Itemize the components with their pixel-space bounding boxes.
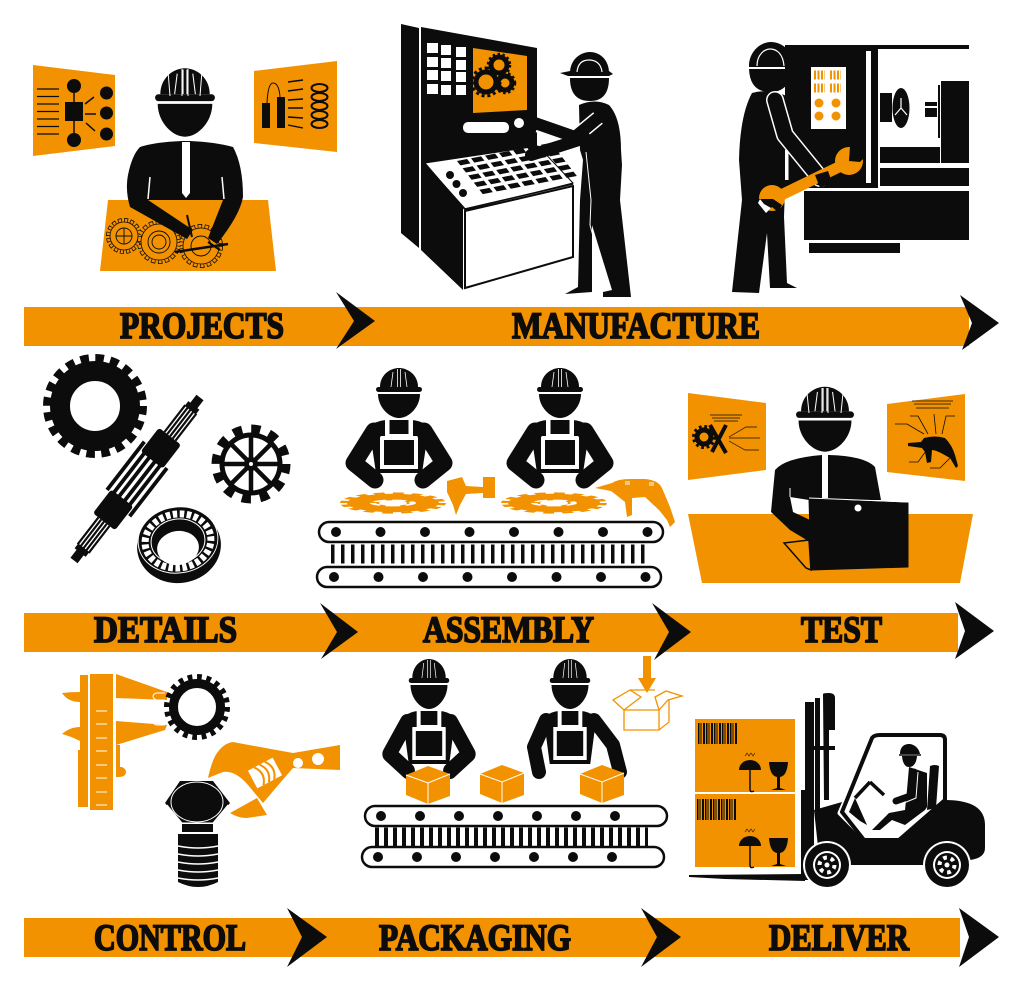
label: DETAILS: DETAILS (94, 610, 237, 651)
panel: chart and coils (254, 61, 337, 152)
arrow: deliver chevron (959, 908, 999, 967)
wheel front (803, 841, 851, 889)
arrow: control chevron (287, 908, 327, 967)
label: PACKAGING: PACKAGING (379, 918, 571, 959)
label: CONTROL: CONTROL (94, 918, 246, 959)
icon: down arrow (638, 656, 656, 693)
icon: spoked wheel gear (216, 429, 286, 499)
conveyor belt (362, 806, 667, 867)
icon: splined shaft (61, 387, 213, 571)
panel: tools diagram (688, 393, 766, 480)
wheel rear (923, 841, 971, 889)
scene: test workstation (688, 387, 973, 583)
scene: packaging line (362, 656, 682, 867)
icon: box on belt two (480, 765, 524, 803)
scene: projects engineer (33, 61, 337, 271)
packaging worker one (389, 659, 469, 771)
icon: orange wrench (758, 146, 866, 214)
icon: adjustable wrench (208, 742, 340, 818)
scene: assembly line (317, 368, 675, 587)
tester figure (771, 387, 881, 542)
engineer figure (127, 68, 243, 244)
assembly worker two (515, 368, 605, 480)
arrow: projects chevron (336, 292, 375, 349)
desk (688, 514, 973, 583)
arrow: packaging chevron (641, 908, 681, 967)
panel: drill diagram (887, 394, 965, 481)
lathe machine (785, 45, 969, 253)
packaging worker two (534, 659, 620, 772)
scene: quality control (62, 674, 340, 887)
mechanic figure (732, 42, 820, 293)
banner: projects and manufacture (24, 292, 999, 350)
label: DELIVER: DELIVER (769, 918, 910, 959)
label: TEST: TEST (801, 610, 882, 651)
icon: large gear (48, 358, 142, 454)
conveyor belt (317, 522, 663, 587)
banner: control, packaging and deliver (24, 908, 999, 967)
arrow: details chevron (320, 603, 358, 659)
label: MANUFACTURE: MANUFACTURE (512, 306, 760, 347)
banner: details, assembly and test (24, 602, 994, 660)
laptop (784, 498, 908, 570)
icon: orange drill small (447, 477, 495, 515)
forklift (689, 693, 985, 889)
scene: manufacture control panel (401, 24, 631, 297)
label: PROJECTS: PROJECTS (120, 306, 284, 347)
assembly worker one (354, 368, 444, 480)
icon: open box outline (613, 690, 682, 730)
icon: box on belt three (580, 765, 624, 803)
icon: orange drill large (595, 479, 675, 527)
desk with gear drawings (100, 200, 276, 271)
icon: orange flat gear one (344, 493, 442, 513)
scene: machine details (48, 358, 286, 588)
scene: forklift delivery (689, 693, 985, 889)
operator figure (514, 52, 631, 297)
driver figure (872, 744, 927, 830)
icon: orange flat gear two (505, 493, 603, 513)
arrow: assembly chevron (652, 603, 691, 660)
label: ASSEMBLY: ASSEMBLY (423, 610, 594, 651)
icon: measured gear (168, 678, 226, 736)
arrow: test chevron (955, 602, 994, 659)
keyboard console (425, 144, 579, 288)
panel: schematic diagram (33, 65, 115, 156)
arrow: manufacture chevron (960, 295, 999, 350)
icon: ball bearing (132, 502, 226, 588)
icon: box on belt one (406, 766, 450, 804)
control cabinet (401, 24, 537, 290)
scene: manufacture lathe (732, 42, 969, 293)
icon: orange caliper (62, 674, 167, 810)
cargo box upper (695, 719, 795, 792)
icon: hex bolt (165, 781, 230, 887)
cargo box lower (695, 794, 795, 868)
